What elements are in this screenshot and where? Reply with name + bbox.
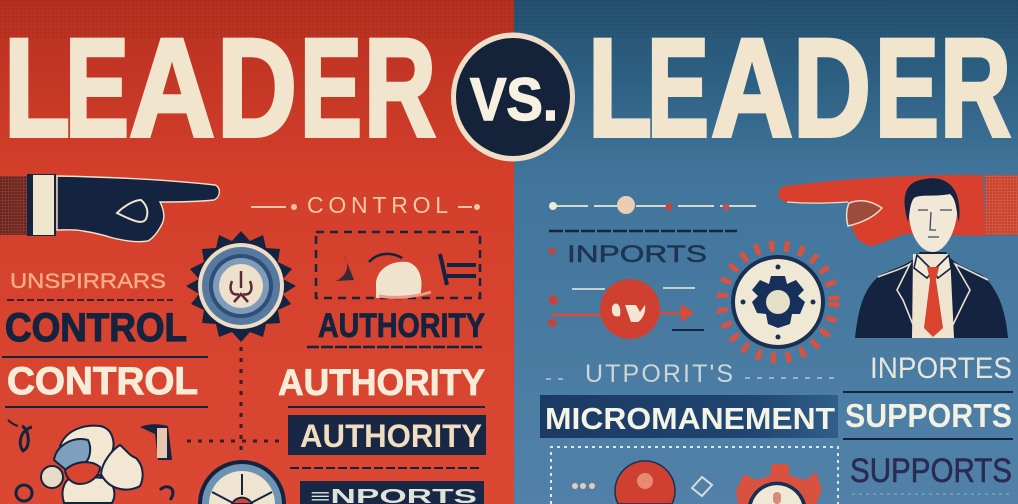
heading: left LEADER: E bbox=[300, 9, 362, 166]
panel: dotted box bottom right bbox=[551, 447, 838, 504]
divider dotted bbox=[852, 493, 1010, 495]
heading: right LEADER: E bbox=[647, 9, 709, 166]
heading: left LEADER bbox=[4, 9, 436, 166]
heading: left LEADER: R bbox=[364, 9, 436, 166]
box: INPORTS on navy bbox=[300, 481, 484, 504]
text: CONTROL cream: CONTROL bbox=[7, 360, 198, 403]
heading: right LEADER bbox=[588, 9, 1011, 166]
icon: red circle with arrow bbox=[547, 279, 704, 339]
text: AUTHORITY cream: AUTHORITY bbox=[278, 362, 485, 403]
heading: left LEADER: E bbox=[65, 9, 129, 166]
heading: right LEADER: L bbox=[588, 9, 652, 166]
heading: left LEADER: L bbox=[4, 9, 70, 166]
icon: right pointing red hand bbox=[778, 175, 1018, 246]
icon: dashed box with hand symbols bbox=[316, 232, 480, 298]
label: CONTROL top: CONTROL bbox=[307, 192, 448, 218]
text: CONTROL navy: CONTROL bbox=[5, 306, 187, 350]
connector: dotted lines bbox=[187, 347, 284, 452]
text: AUTHORITY navy: AUTHORITY bbox=[318, 307, 485, 345]
icon: bottom left circular dial bbox=[198, 460, 286, 504]
badge: VS.: VS. bbox=[470, 66, 558, 133]
badge: VS. bbox=[451, 32, 575, 162]
divider dashes right bbox=[549, 230, 737, 232]
divider dashes bbox=[307, 346, 482, 348]
panel: left red background bbox=[0, 0, 514, 504]
icon: left cluster of shapes bbox=[8, 420, 173, 503]
label: CONTROL top bbox=[251, 192, 480, 218]
icon: right cream gear with red spikes bbox=[722, 246, 834, 358]
divider bbox=[843, 391, 1013, 393]
text: UNSPIRRARS: UNSPIRRARS bbox=[10, 270, 166, 293]
text: INPORTS dark: INPORTS bbox=[567, 241, 707, 268]
heading: right LEADER: A bbox=[711, 9, 793, 166]
divider bbox=[2, 356, 208, 358]
divider bbox=[288, 406, 485, 408]
divider dashes left bbox=[7, 299, 173, 301]
icon: left pointing hand bbox=[0, 174, 219, 242]
divider bbox=[843, 438, 1013, 440]
icon: businessman bbox=[855, 178, 1008, 338]
text: INPORTS dark bbox=[548, 241, 707, 268]
text: UTPORIT'S: UTPORIT'S bbox=[585, 360, 733, 388]
icon: connector with dots top right panel bbox=[549, 196, 760, 214]
heading: left LEADER: A bbox=[129, 9, 215, 166]
heading: left LEADER: D bbox=[217, 9, 297, 166]
heading: right LEADER: D bbox=[793, 9, 871, 166]
divider dashes bbox=[290, 467, 482, 469]
icon: bottom red gear bbox=[736, 464, 822, 504]
panel: right blue background bbox=[514, 0, 1018, 504]
icon: left gear badge bbox=[186, 231, 296, 342]
divider bbox=[5, 406, 208, 408]
heading: right LEADER: E bbox=[875, 9, 939, 166]
box: AUTHORITY on navy: AUTHORITY bbox=[300, 418, 482, 454]
box: MICROMANEMENT: MICROMANEMENT bbox=[545, 401, 835, 436]
